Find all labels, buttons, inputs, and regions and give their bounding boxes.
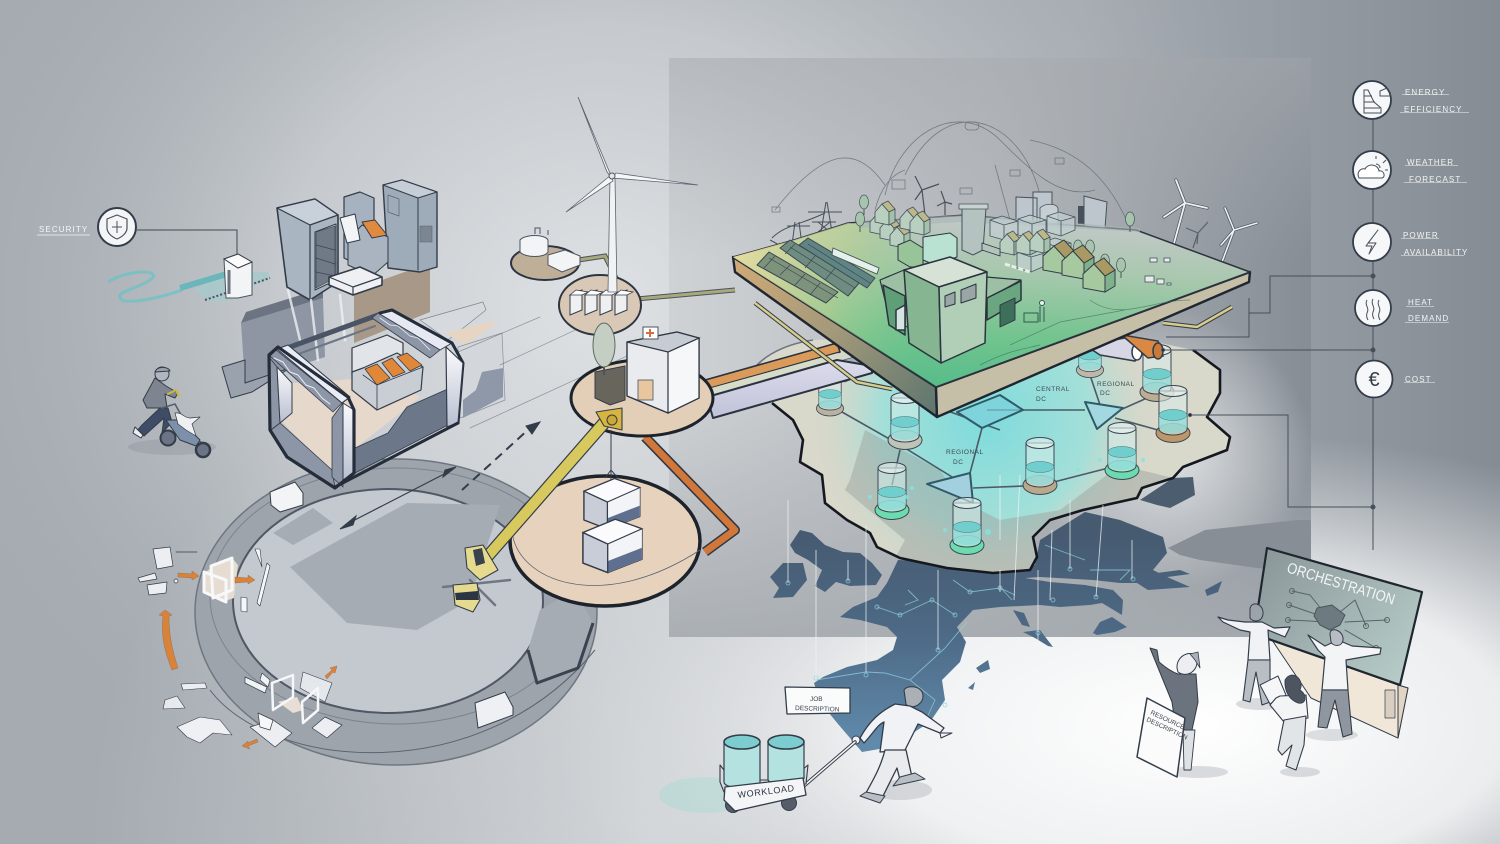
security gate with conveyor [108,254,270,302]
blob: regional land [747,330,1230,573]
legend: heat demand [1355,290,1449,326]
network hub: regional DC east: REGIONAL [1097,381,1135,388]
panel and frame split [272,672,332,723]
solar panels [757,238,875,303]
map: Europe [770,477,1222,752]
platform top [733,215,1250,387]
arrow: dashed module path [462,422,540,490]
column: grey [222,288,325,398]
ring artefacts: material lifecycle [138,482,513,747]
network hub: central DC: CENTRAL [1036,386,1070,393]
network links [842,375,1165,503]
icon: shield [98,208,136,246]
cabinet: small rear [344,192,374,262]
person with stroller [128,367,216,457]
module: placed [583,519,642,572]
turbine medium [1221,208,1257,262]
icon: energy label [1353,81,1391,119]
platform sides [733,257,937,417]
AI chip [1314,605,1345,630]
woman with clipboard [1260,675,1320,777]
map: network lines on Europe [786,545,1135,722]
legend: weather forecast [1353,151,1467,189]
legend: power availability: POWER [1403,231,1439,240]
job description sign [785,687,850,714]
cabinet: right [383,180,437,272]
network hub: regional DC west: DC [953,459,963,466]
turbines behind city [915,176,952,215]
unit with orange top [340,214,388,276]
box on ring bottom [475,692,513,728]
workload cylinders [816,332,1190,554]
module: lifted [584,479,640,529]
module floor [283,377,420,470]
job description sign: JOB [810,696,823,703]
city network arcs [772,122,1130,228]
rear ghost module [420,300,640,428]
column: brown [354,263,430,343]
disk: hospital site [571,323,713,436]
person with trolley [1024,300,1044,322]
data centre exploded view [222,180,640,488]
legend: power availability [1353,223,1468,261]
arrow: double-headed measure [340,467,456,529]
disk: biogas plant [511,228,580,280]
battery row [832,248,879,274]
legend: cost [1356,360,1435,398]
man right at board [1306,630,1381,741]
legend: energy efficiency: ENERGY [1405,88,1445,97]
blob shadow [845,430,1173,573]
pipes: heat and utility under the platform [698,303,1232,418]
houses foreground [1043,240,1115,292]
man pulling cart [852,687,952,803]
blocks [245,677,267,693]
orchestration board [1218,548,1422,777]
icon: euro: € [1368,369,1380,391]
ring track [195,459,597,765]
background city [856,192,1140,278]
label: security with icon [37,208,237,258]
wind turbine large [566,97,698,292]
pylons [760,202,842,255]
ring notch [528,590,593,683]
panel: grey backdrop [669,58,1311,637]
disk: wind turbine pad [559,256,735,335]
orange process arrows [159,571,337,749]
man left at board [1218,604,1290,710]
module frame front [269,345,458,488]
icon: lightning [1353,223,1391,261]
legend: energy efficiency: EFFICIENCY [1404,105,1463,114]
network hub: central DC: DC [1036,396,1046,403]
legend: power availability: AVAILABILITY [1404,248,1468,257]
right sidebar connector lines [1162,100,1375,550]
module frame rear [290,310,463,427]
animals [1145,258,1171,285]
resource description board [1137,698,1189,777]
platform: city block [733,192,1250,417]
legend: energy efficiency [1353,81,1469,119]
network hub: central DC [957,386,1070,428]
frame module [204,558,238,602]
module side wall [355,388,450,473]
resource description board: RESOURCE [1149,709,1186,732]
icon: heat waves [1355,290,1391,326]
wind turbines right of platform [1164,180,1257,262]
label: security with icon: SECURITY [39,225,88,234]
legend: cost: COST [1405,375,1432,384]
network hub: regional DC west [927,449,984,503]
cabinet: left [277,199,338,300]
turbine large [1164,180,1207,247]
vertical projection lines [788,475,1132,680]
workload cart: WORKLOAD [737,783,795,800]
network hub: regional DC east [1085,381,1135,429]
network hub: regional DC west: REGIONAL [946,449,984,456]
job description sign: DESCRIPTION [795,705,840,714]
box on ring top [270,482,303,512]
legend: heat demand: DEMAND [1408,314,1449,323]
workload cart [659,735,855,813]
data centre building [880,257,1021,363]
legend: heat demand: HEAT [1408,298,1433,307]
rubble [177,717,232,743]
server block with orange tops [352,335,423,410]
legend: weather forecast: WEATHER [1407,158,1454,167]
orange district-heating pipe [645,437,735,552]
disk: construction site [510,430,700,606]
orchestration board: ORCHESTRATION [1285,560,1397,609]
map legend figure: man with cart [659,687,952,813]
turbine small [1186,222,1208,248]
crane [443,408,622,612]
map: eastern land mass [1168,520,1311,575]
parts right of frame [241,549,270,612]
icon: cloud and sun [1353,151,1391,189]
woman with resource description [1137,648,1228,778]
parts cluster left [138,547,197,595]
network hub: regional DC east: DC [1100,390,1110,397]
platform slab [329,267,382,295]
resource description board: DESCRIPTION [1145,716,1189,742]
legend: weather forecast: FORECAST [1409,175,1461,184]
